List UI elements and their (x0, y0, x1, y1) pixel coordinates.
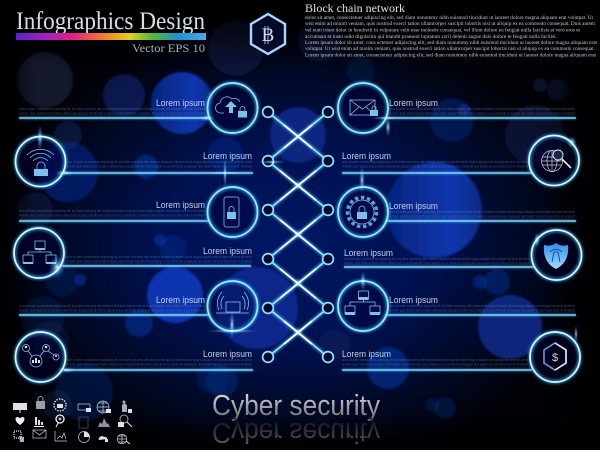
row labels: veniam, quis nostrud exerci tation ullamcorper suscipit lobortis nisl ut aliquip ex ea commodo consequat duis autem vel eum iriure dolor in hendrerit (389, 214, 575, 218)
ring: shield (532, 230, 582, 280)
lens flares (37, 115, 578, 373)
row labels: Lorem ipsum (203, 246, 252, 256)
icon: bar chart (34, 417, 44, 426)
cyber security heading: Cyber security (212, 390, 380, 422)
ring: gear lock (338, 187, 388, 237)
row labels: Lorem ipsum (389, 98, 438, 108)
row labels: dolor sit amet, consectetuer adipiscing elit, sed diam nonummy nibh euismod tincidunt ut laoreet dolore magna aliquam erat volutpat wisi enim ad minim (19, 107, 205, 111)
small icon set (13, 396, 132, 444)
icon: network right (345, 291, 380, 315)
row labels: dolor sit amet, consectetuer adipiscing elit, sed diam nonummy nibh euismod tincidunt ut laoreet dolore magna aliquam erat volutpat wisi enim ad minim (19, 304, 205, 308)
icon: gear padlock (54, 399, 66, 411)
network lattice (263, 107, 333, 362)
icon: screen lock (78, 404, 91, 412)
row labels: veniam, quis nostrud exerci tation ullamcorper suscipit lobortis nisl ut aliquip ex ea commodo consequat duis autem vel eum iriure dolor in hendrerit (389, 112, 575, 116)
icon: cloud cluster (99, 436, 108, 442)
row labels: Lorem ipsum (156, 295, 205, 305)
ring: cloud lock (208, 83, 258, 133)
row labels: Lorem ipsum (203, 151, 252, 161)
row labels: veniam, quis nostrud exerci tation ullamcorper suscipit lobortis nisl ut aliquip ex ea commodo consequat duis autem vel eum iriure dolor in hendrerit (19, 112, 205, 116)
text block: block chain network (305, 3, 597, 58)
row labels: Lorem ipsum (342, 349, 391, 359)
ring: dollar hexagon (530, 332, 580, 382)
row labels: Lorem ipsum (203, 349, 252, 359)
title block: Vector EPS 10 (132, 41, 205, 55)
icon: people lock (122, 400, 132, 413)
row labels: Lorem ipsum (389, 295, 438, 305)
row labels (19, 98, 575, 366)
row labels: dolor sit amet, consectetuer adipiscing elit, sed diam nonummy nibh euismod tincidunt ut laoreet dolore magna aliquam erat volutpat wisi enim ad minim (19, 209, 205, 213)
icon: envelope (33, 430, 46, 438)
ring: mail lock (338, 83, 388, 133)
icon: line chart (55, 431, 67, 441)
ring: network right (338, 281, 388, 331)
icon: network (23, 241, 56, 264)
icon: shield (544, 243, 568, 269)
icon: dollar hexagon: $ (552, 352, 558, 364)
ring: people (16, 332, 66, 382)
row labels: dolor sit amet, consectetuer adipiscing elit, sed diam nonummy nibh euismod tincidunt ut laoreet dolore magna aliquam erat volutpat wisi enim ad minim (66, 160, 252, 164)
text block: block chain network: accumsan et iusto odio dignissim qui blandit praesent luptatum zzril delenit augue duis dolore te feugait nulla facilisi. (305, 33, 558, 40)
row labels: veniam, quis nostrud exerci tation ullamcorper suscipit lobortis nisl ut aliquip ex ea commodo consequat duis autem vel eum iriure dolor in hendrerit (66, 164, 252, 168)
text block: block chain network: Block chain network (305, 3, 405, 15)
connector nodes right (323, 107, 333, 362)
row labels: dolor sit amet, consectetuer adipiscing elit, sed diam nonummy nibh euismod tincidunt ut laoreet dolore magna aliquam erat volutpat wisi enim ad minim (342, 358, 528, 362)
ring: globe search (529, 136, 579, 186)
row labels: dolor sit amet, consectetuer adipiscing elit, sed diam nonummy nibh euismod tincidunt ut laoreet dolore magna aliquam erat volutpat wisi enim ad minim (344, 257, 530, 261)
row labels: veniam, quis nostrud exerci tation ullamcorper suscipit lobortis nisl ut aliquip ex ea commodo consequat duis autem vel eum iriure dolor in hendrerit (19, 308, 205, 312)
ring: wireless laptop (208, 281, 258, 331)
icon: document (79, 417, 88, 428)
row labels: Lorem ipsum (156, 200, 205, 210)
icon: globe lock (97, 401, 111, 413)
icon: magnifier padlock (118, 415, 132, 427)
icon: search plus (56, 415, 64, 427)
icon: heart (16, 417, 24, 425)
row labels: dolor sit amet, consectetuer adipiscing elit, sed diam nonummy nibh euismod tincidunt ut laoreet dolore magna aliquam erat volutpat wisi enim ad minim (66, 358, 252, 362)
row labels: dolor sit amet, consectetuer adipiscing elit, sed diam nonummy nibh euismod tincidunt ut laoreet dolore magna aliquam erat volutpat wisi enim ad minim (342, 160, 528, 164)
ring: wifi lock (16, 136, 66, 186)
row labels: veniam, quis nostrud exerci tation ullamcorper suscipit lobortis nisl ut aliquip ex ea commodo consequat duis autem vel eum iriure dolor in hendrerit (342, 362, 528, 366)
row labels: dolor sit amet, consectetuer adipiscing elit, sed diam nonummy nibh euismod tincidunt ut laoreet dolore magna aliquam erat volutpat wisi enim ad minim (389, 107, 575, 111)
left row lines (19, 118, 253, 370)
ring: network left (14, 228, 64, 278)
icon: mail lock (350, 100, 378, 116)
icon: people network (22, 344, 59, 367)
icon: cloud (215, 97, 247, 118)
row labels: veniam, quis nostrud exerci tation ullamcorper suscipit lobortis nisl ut aliquip ex ea commodo consequat duis autem vel eum iriure dolor in hendrerit (344, 262, 530, 266)
cyber security heading (212, 390, 380, 448)
row labels: Lorem ipsum (342, 151, 391, 161)
connector nodes left (263, 107, 273, 362)
row labels: veniam, quis nostrud exerci tation ullamcorper suscipit lobortis nisl ut aliquip ex ea commodo consequat duis autem vel eum iriure dolor in hendrerit (389, 308, 575, 312)
icon: keypad hand (14, 431, 24, 442)
icon: monitor (13, 403, 27, 413)
rainbow bar (16, 33, 206, 40)
row labels: dolor sit amet, consectetuer adipiscing elit, sed diam nonummy nibh euismod tincidunt ut laoreet dolore magna aliquam erat volutpat wisi enim ad minim (389, 304, 575, 308)
row labels: Lorem ipsum (389, 201, 438, 211)
title block (16, 8, 206, 55)
reflection: Cyber security (212, 416, 380, 448)
ring: phone lock (208, 187, 258, 237)
icon: phone lock (224, 197, 239, 227)
row labels: dolor sit amet, consectetuer adipiscing elit, sed diam nonummy nibh euismod tincidunt ut laoreet dolore magna aliquam erat volutpat wisi enim ad minim (389, 210, 575, 214)
icon: globe search (542, 150, 571, 172)
icon: wireless laptop (216, 292, 249, 313)
icon: hexagon bitcoin logo: B (262, 25, 274, 46)
icon: padlock (36, 396, 45, 409)
icon: area chart (98, 418, 110, 427)
row labels: Lorem ipsum (156, 98, 205, 108)
row labels: veniam, quis nostrud exerci tation ullamcorper suscipit lobortis nisl ut aliquip ex ea commodo consequat duis autem vel eum iriure dolor in hendrerit (342, 164, 528, 168)
icon: globe search small (117, 434, 130, 444)
icon: pie chart (78, 432, 90, 442)
row labels: veniam, quis nostrud exerci tation ullamcorper suscipit lobortis nisl ut aliquip ex ea commodo consequat duis autem vel eum iriure dolor in hendrerit (66, 362, 252, 366)
row labels: veniam, quis nostrud exerci tation ullamcorper suscipit lobortis nisl ut aliquip ex ea commodo consequat duis autem vel eum iriure dolor in hendrerit (19, 214, 205, 218)
icon: wifi lock (27, 149, 54, 176)
text block: block chain network: vel eum iriure dolor in hendrerit in vulputate velit esse molestie consequat, vel illum dolore eu feugiat nulla facilisis at vero eros et (305, 26, 580, 33)
row labels: veniam, quis nostrud exerci tation ullamcorper suscipit lobortis nisl ut aliquip ex ea commodo consequat duis autem vel eum iriure dolor in hendrerit (66, 260, 252, 264)
icon: gear lock (348, 198, 376, 226)
row labels: Lorem ipsum (344, 248, 393, 258)
icon: hexagon bitcoin logo (251, 14, 285, 54)
row labels: dolor sit amet, consectetuer adipiscing elit, sed diam nonummy nibh euismod tincidunt ut laoreet dolore magna aliquam erat volutpat wisi enim ad minim (66, 255, 252, 259)
title block: Infographics Design (16, 8, 205, 35)
right row lines (342, 118, 576, 370)
